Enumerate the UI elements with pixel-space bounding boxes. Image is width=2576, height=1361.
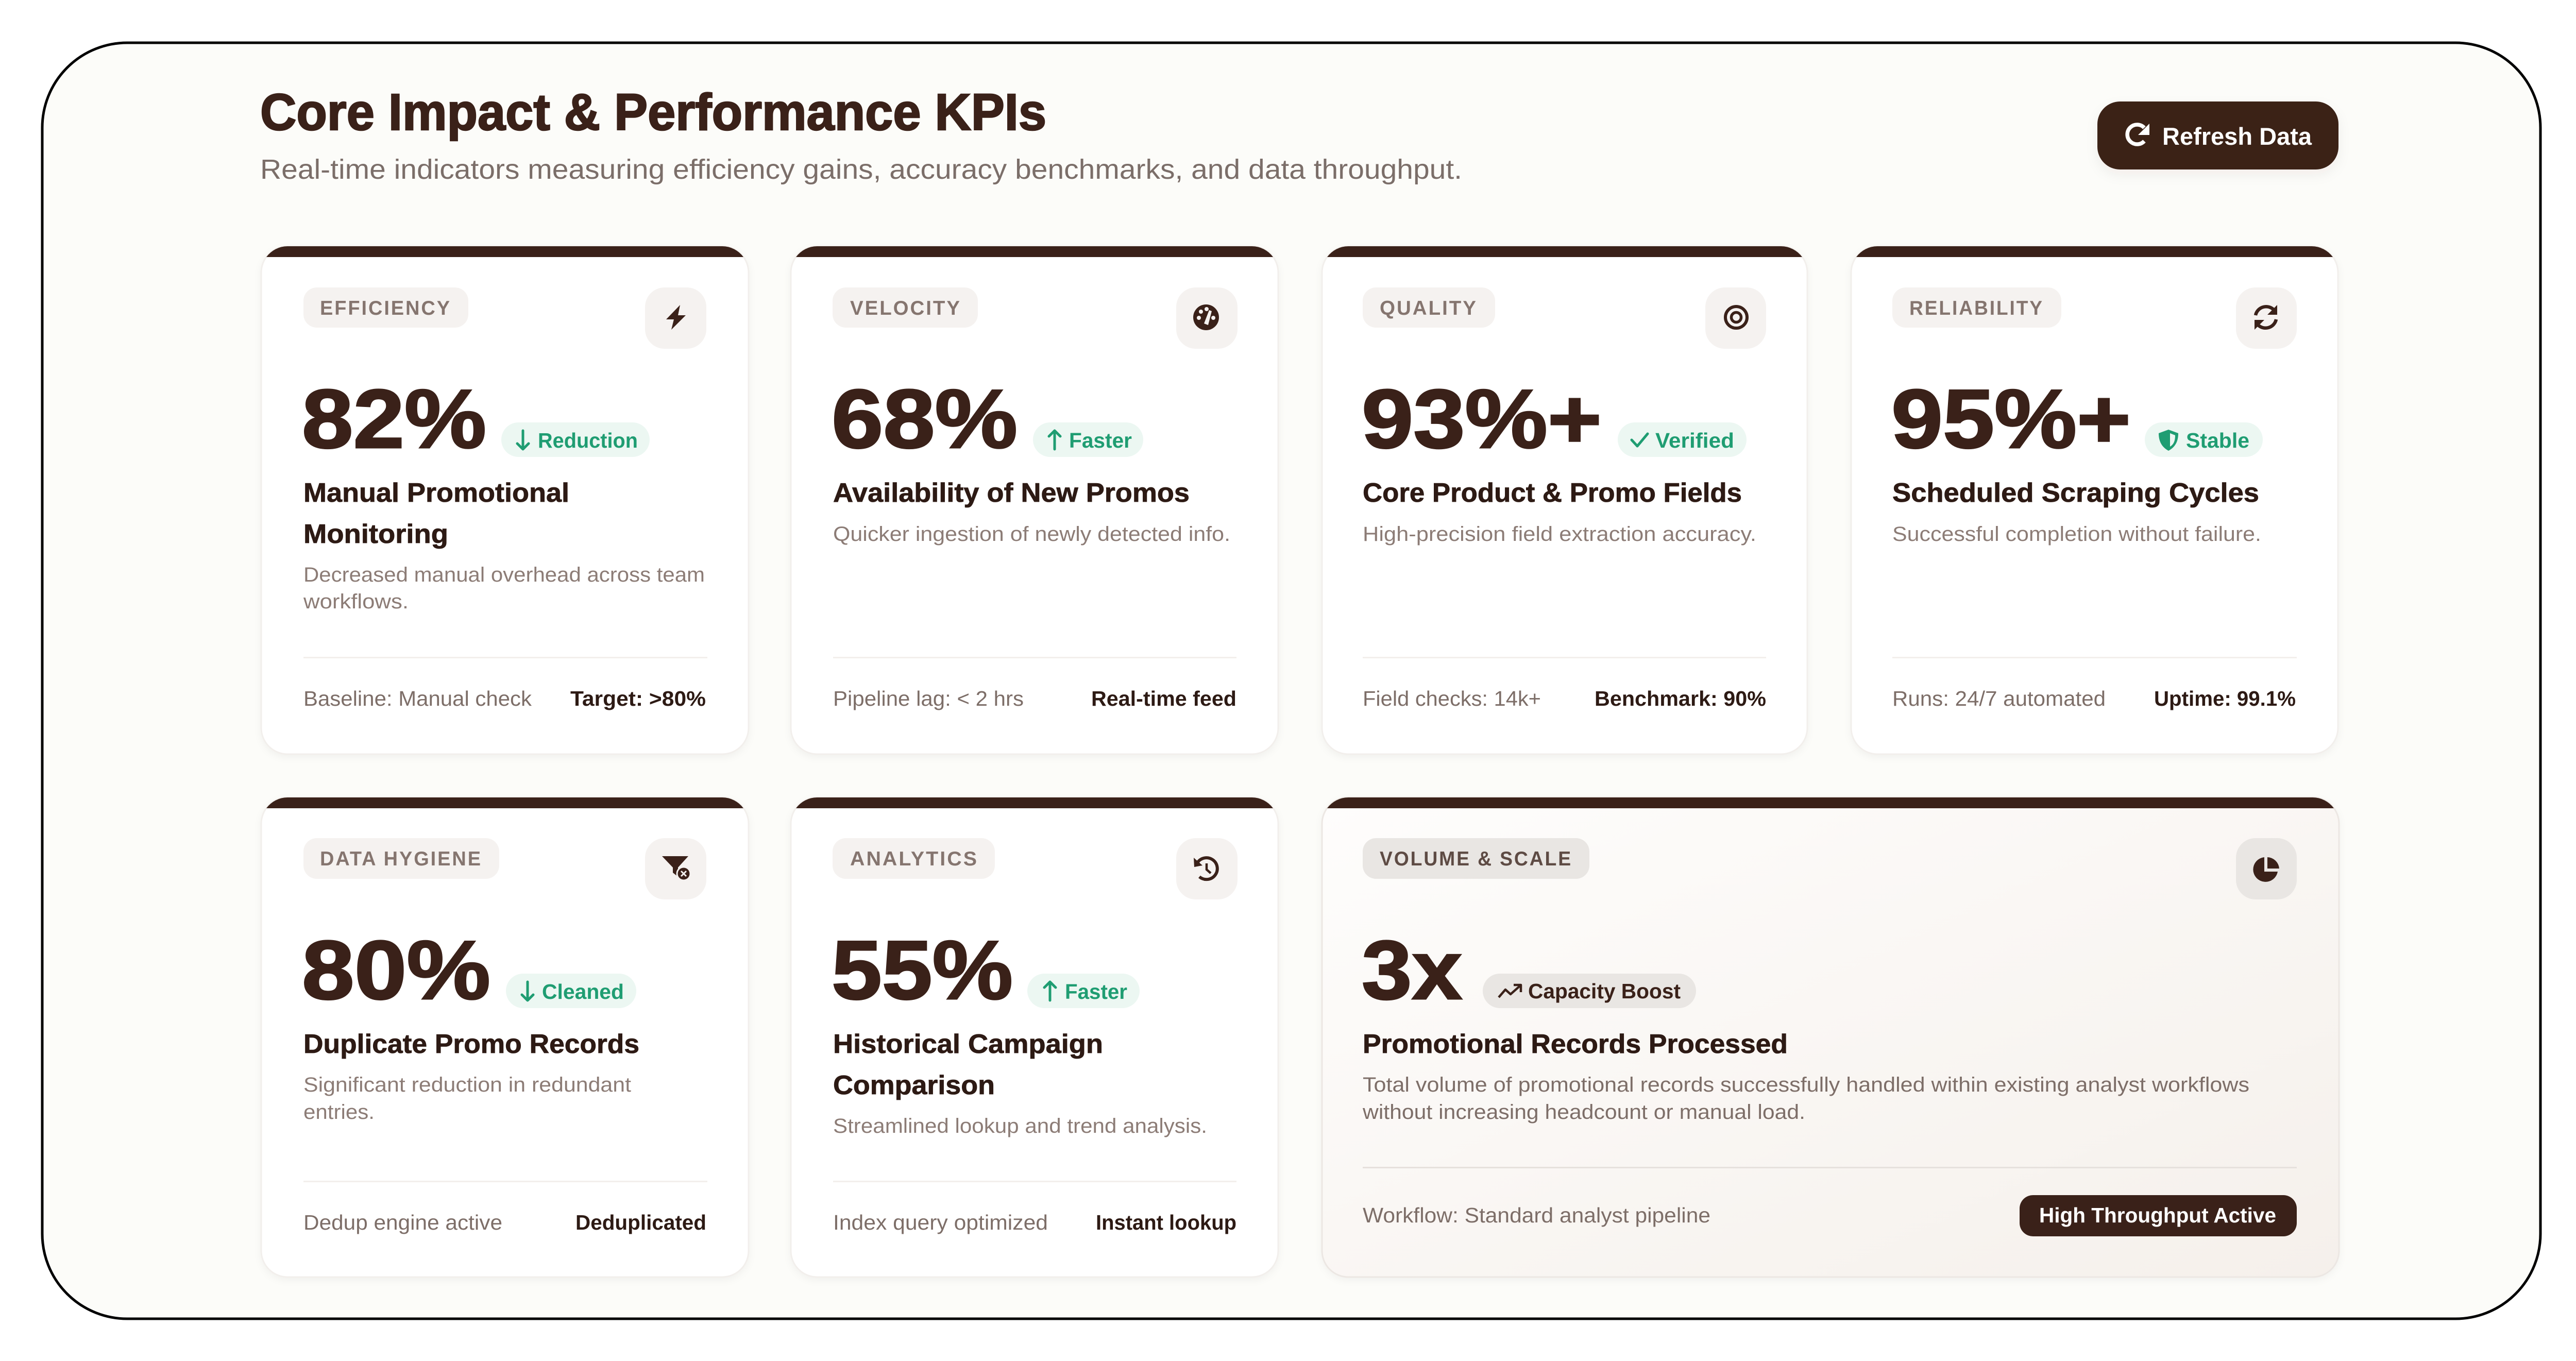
description: without increasing headcount or manual load.	[1362, 1101, 1805, 1124]
tag: QUALITY	[1380, 297, 1478, 319]
metric value: 82%	[302, 372, 486, 466]
tag: VOLUME & SCALE	[1380, 848, 1572, 870]
description: Significant reduction in redundant	[303, 1074, 631, 1096]
footer	[303, 1211, 706, 1234]
footer: Index query optimized	[833, 1211, 1048, 1234]
badge: Stable	[2186, 429, 2249, 452]
badge: Faster	[1065, 980, 1127, 1003]
footer: Baseline: Manual check	[303, 687, 532, 710]
refresh button	[2097, 101, 2338, 169]
status pill	[2020, 1195, 2297, 1236]
metric title: Core Product & Promo Fields	[1363, 478, 1742, 508]
metric value: 95%+	[1891, 372, 2131, 466]
icon: refresh	[2127, 124, 2149, 144]
metric value: 68%	[832, 372, 1018, 466]
tag: RELIABILITY	[1909, 297, 2044, 319]
metric title: Scheduled Scraping Cycles	[1892, 478, 2259, 508]
footer	[1363, 1195, 2297, 1236]
metric title: Manual Promotional	[303, 478, 569, 508]
metric value: 55%	[832, 924, 1013, 1017]
metric value: 80%	[302, 924, 490, 1017]
badge	[1618, 422, 1747, 457]
button label: Refresh Data	[2162, 123, 2312, 150]
header	[260, 83, 1462, 185]
metric title: Availability of New Promos	[833, 478, 1190, 508]
footer: Workflow: Standard analyst pipeline	[1363, 1203, 1710, 1227]
footer: Field checks: 14k+	[1363, 687, 1541, 710]
description: Decreased manual overhead across team	[303, 564, 705, 586]
badge: Cleaned	[542, 980, 624, 1003]
badge: Verified	[1655, 429, 1734, 452]
tag: DATA HYGIENE	[320, 848, 482, 870]
icon: bolt	[645, 287, 706, 349]
footer: Runs: 24/7 automated	[1892, 687, 2106, 710]
tag	[303, 287, 468, 328]
status pill: High Throughput Active	[2039, 1203, 2276, 1227]
tag	[1892, 287, 2061, 328]
subtitle: Real-time indicators measuring efficiency gains, accuracy benchmarks, and data throughput.	[260, 154, 1462, 185]
tag: VELOCITY	[850, 297, 961, 319]
footer: Pipeline lag: < 2 hrs	[833, 687, 1024, 710]
panel: data hygiene	[261, 797, 749, 1277]
description	[303, 564, 705, 613]
footer: Instant lookup	[1096, 1211, 1236, 1234]
tag: ANALYTICS	[850, 848, 978, 870]
tag	[833, 287, 978, 328]
badge	[1483, 974, 1696, 1008]
description: Successful completion without failure.	[1892, 523, 2261, 546]
footer: Dedup engine active	[303, 1211, 502, 1234]
footer	[1892, 687, 2296, 710]
panel: efficiency	[261, 246, 749, 754]
tag: EFFICIENCY	[320, 297, 451, 319]
icon: funnel with x	[645, 838, 706, 899]
description: Streamlined lookup and trend analysis.	[833, 1115, 1207, 1137]
icon: gauge	[1176, 287, 1238, 349]
description: Quicker ingestion of newly detected info.	[833, 523, 1230, 546]
icon: target	[1705, 287, 1766, 349]
description: entries.	[303, 1101, 375, 1124]
badge: Reduction	[538, 429, 638, 452]
metric value: 3x	[1362, 924, 1462, 1017]
title: Core Impact & Performance KPIs	[260, 83, 1046, 141]
description	[1362, 1074, 2249, 1124]
panel: velocity	[791, 246, 1278, 754]
footer	[1363, 687, 1766, 710]
metric title: Monitoring	[303, 519, 448, 549]
footer: Uptime: 99.1%	[2154, 687, 2296, 710]
description	[303, 1074, 631, 1124]
footer: Benchmark: 90%	[1595, 687, 1766, 710]
metric title	[303, 478, 569, 549]
metric title	[833, 1029, 1103, 1100]
panel: volume and scale	[1322, 797, 2339, 1277]
footer: Deduplicated	[575, 1211, 706, 1234]
footer: Target: >80%	[570, 687, 706, 710]
tag	[303, 838, 499, 879]
footer: Real-time feed	[1091, 687, 1236, 710]
badge	[1027, 974, 1140, 1008]
metric value: 93%+	[1362, 372, 1602, 466]
badge	[506, 974, 636, 1008]
tag	[1363, 287, 1495, 328]
metric title: Promotional Records Processed	[1363, 1029, 1788, 1059]
panel: analytics	[791, 797, 1278, 1277]
panel: reliability	[1851, 246, 2338, 754]
metric title: Historical Campaign	[833, 1029, 1103, 1059]
metric title: Duplicate Promo Records	[303, 1029, 639, 1059]
metric title: Comparison	[833, 1070, 995, 1100]
icon: pie chart	[2236, 838, 2297, 899]
footer	[833, 687, 1236, 710]
description: Total volume of promotional records successfully handled within existing analyst workflows	[1363, 1074, 2249, 1096]
footer	[833, 1211, 1236, 1234]
badge: Faster	[1069, 429, 1132, 452]
tag	[1363, 838, 1589, 879]
footer	[303, 687, 706, 710]
description: High-precision field extraction accuracy.	[1363, 523, 1756, 546]
badge	[1033, 422, 1143, 457]
badge: Capacity Boost	[1528, 979, 1681, 1003]
panel: quality	[1322, 246, 1807, 754]
badge	[2145, 422, 2263, 457]
icon: sync	[2236, 287, 2297, 349]
description: workflows.	[303, 590, 409, 613]
icon: history	[1176, 838, 1238, 899]
badge	[501, 422, 650, 457]
tag	[833, 838, 995, 879]
